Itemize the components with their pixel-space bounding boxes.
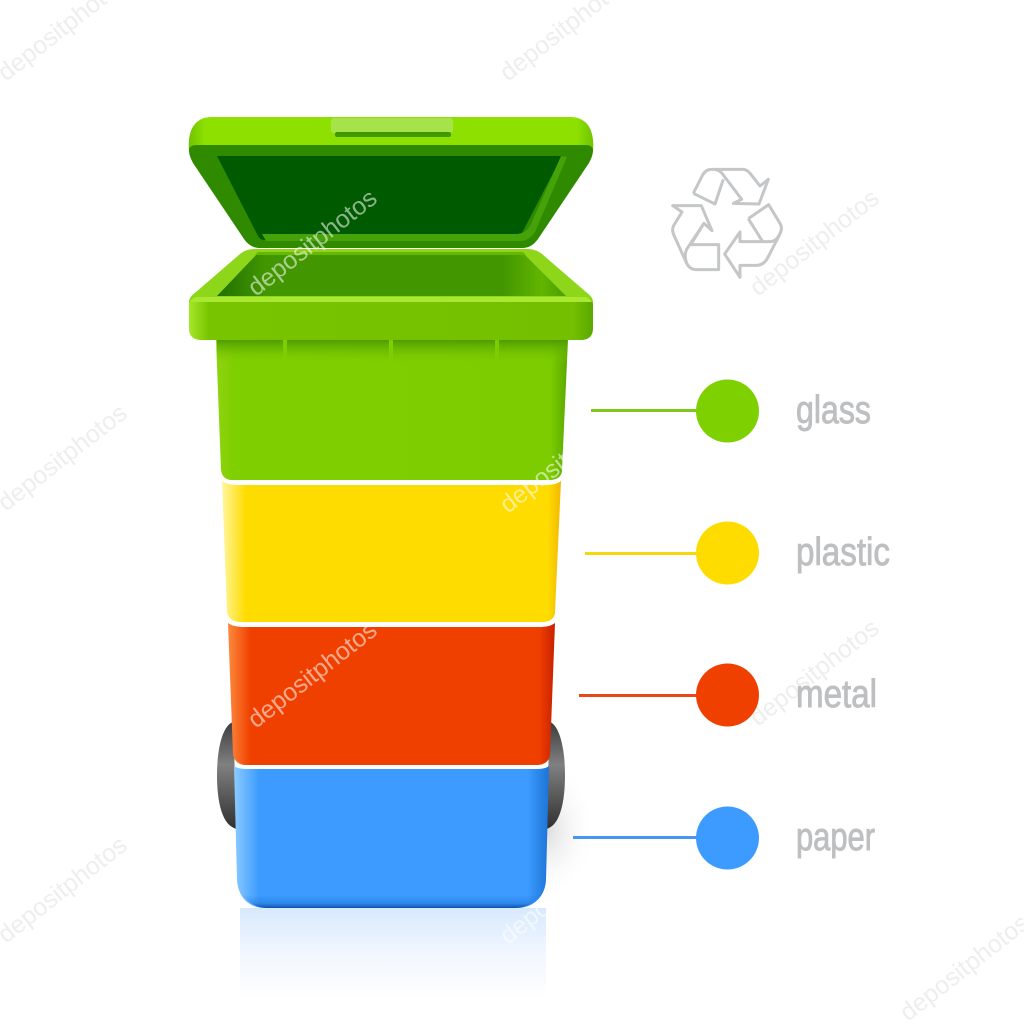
watermark pattern: depositphotos: [744, 614, 884, 732]
bin opening: [189, 249, 593, 306]
legend: metal: [579, 664, 877, 726]
bin watermark: depositphotos: [242, 616, 382, 734]
wheels: [217, 722, 565, 829]
bin watermark: depositphotos: [494, 401, 634, 519]
watermark pattern: depositphotos: [744, 184, 884, 302]
legend: plastic: [585, 522, 890, 584]
bin watermark: depositphotos: [494, 832, 634, 950]
legend: glass: glass: [796, 389, 871, 432]
icon: recycling symbol: [672, 169, 781, 277]
ground shadow: [494, 760, 598, 900]
green section: glass: [216, 340, 568, 480]
lid handle: [331, 118, 453, 137]
legend: plastic: plastic: [796, 531, 890, 574]
legend: paper: [573, 806, 875, 870]
legend: metal: metal: [796, 673, 877, 716]
yellow section: plastic: [222, 481, 561, 622]
bin watermark: [242, 184, 634, 950]
legend: paper: paper: [796, 816, 875, 859]
recycling bin: [189, 117, 593, 908]
legend: glass: [591, 380, 871, 442]
rim: [189, 297, 593, 340]
lid: [189, 117, 593, 248]
bin reflection: [240, 908, 546, 1000]
bin watermark: depositphotos: [242, 184, 382, 302]
red section: metal: [228, 623, 555, 765]
blue section: paper: [234, 766, 549, 908]
